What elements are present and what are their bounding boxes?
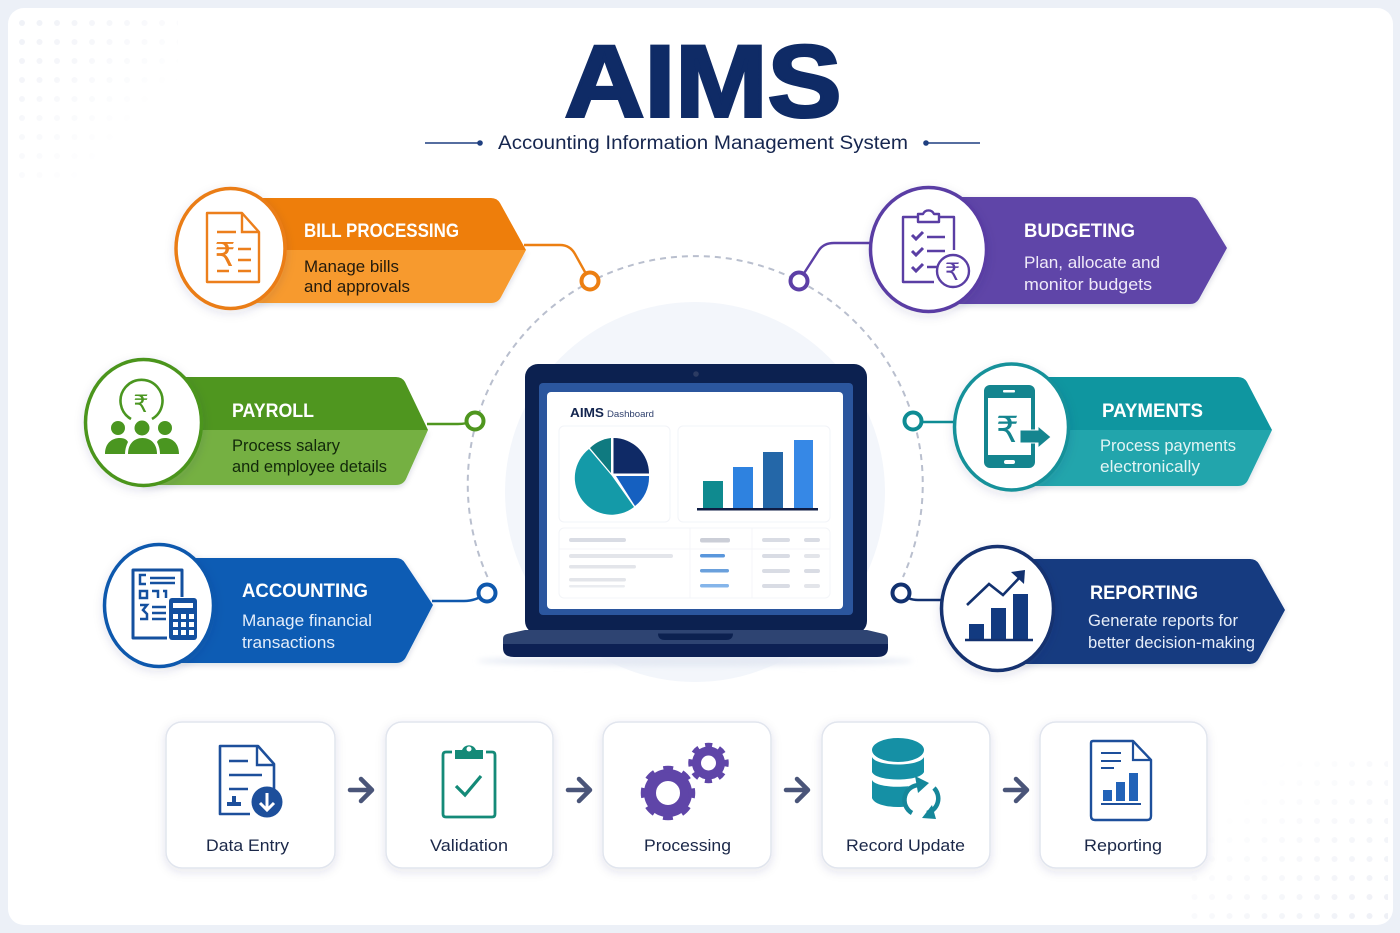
dashboard screen [547, 392, 843, 609]
label: Processing [644, 836, 731, 855]
arrow [350, 779, 372, 801]
subtitle with rules [425, 133, 980, 154]
description: better decision-making [1088, 633, 1255, 652]
step: data entry [166, 722, 335, 868]
laptop base [503, 630, 888, 657]
description: Manage financial [242, 611, 372, 630]
arrow [568, 779, 590, 801]
arrow [1005, 779, 1027, 801]
icon: employees [86, 360, 202, 486]
subtitle with rules: Accounting Information Management System [498, 133, 908, 154]
connector: reporting [892, 584, 942, 602]
dashboard title: Dashboard [607, 409, 654, 420]
icon: database sync [872, 738, 944, 819]
icon: document download [220, 746, 282, 818]
heading: REPORTING [1090, 583, 1198, 604]
heading: ACCOUNTING [242, 581, 368, 602]
connector: accounting [432, 584, 496, 602]
label: Validation [430, 836, 508, 855]
arrow [786, 779, 808, 801]
step: validation [386, 722, 553, 868]
panel: budgeting [870, 188, 1227, 312]
icon: ledger and calculator [104, 544, 214, 666]
label: Record Update [846, 836, 965, 855]
icon: report document [1091, 741, 1151, 820]
icon: phone payment [954, 364, 1068, 490]
description: Generate reports for [1088, 611, 1238, 630]
icon: clipboard check [443, 745, 495, 817]
step: record update [822, 722, 990, 868]
description: and approvals [304, 277, 410, 296]
icon: employees: ₹ [133, 390, 149, 418]
connector: payments [904, 412, 955, 430]
description: transactions [242, 633, 335, 652]
connector: bill processing [524, 245, 598, 290]
bar chart [678, 426, 830, 522]
icon: budget clipboard [870, 188, 986, 312]
title: AIMS [564, 24, 842, 138]
description: Manage bills [304, 257, 399, 276]
data table [559, 528, 830, 598]
icon: bill document: ₹ [214, 235, 236, 274]
panel: payments [954, 364, 1272, 490]
panel: payroll [86, 360, 428, 486]
pie chart [559, 426, 670, 522]
panel: accounting [104, 544, 433, 666]
icon: bill document [176, 188, 285, 308]
heading: PAYMENTS [1102, 401, 1203, 422]
pale circle behind laptop [505, 302, 885, 682]
heading: BUDGETING [1024, 221, 1135, 242]
description: Process payments [1100, 436, 1236, 455]
description: Plan, allocate and [1024, 253, 1160, 272]
label: Reporting [1084, 836, 1162, 855]
dashboard title: AIMS [570, 405, 604, 420]
icon: gears [644, 745, 726, 817]
laptop [477, 364, 913, 666]
icon: growth chart [942, 546, 1054, 670]
panel: reporting [942, 546, 1285, 670]
connector: budgeting [790, 243, 872, 290]
step: reporting [1040, 722, 1207, 868]
icon: phone payment: ₹ [996, 410, 1019, 451]
description: and employee details [232, 457, 387, 476]
connector: payroll [427, 412, 484, 430]
description: monitor budgets [1024, 275, 1152, 294]
step: processing [603, 722, 771, 868]
heading: PAYROLL [232, 401, 314, 422]
description: electronically [1100, 457, 1201, 476]
dashed orbit arc [468, 256, 923, 577]
icon: budget clipboard: ₹ [945, 258, 960, 286]
description: Process salary [232, 436, 340, 455]
label: Data Entry [206, 836, 290, 855]
panel: bill processing [176, 188, 526, 308]
heading: BILL PROCESSING [304, 221, 459, 242]
